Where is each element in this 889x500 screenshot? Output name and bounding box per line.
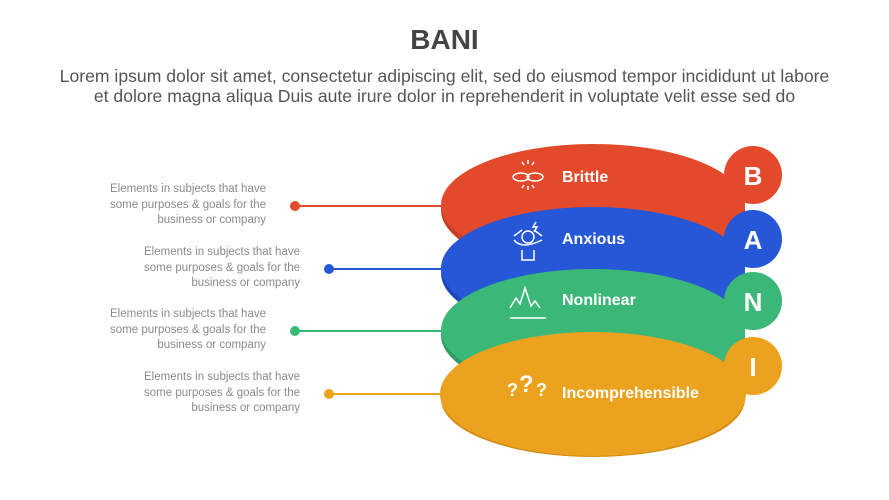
layer: Anxious: Anxious bbox=[562, 231, 625, 248]
layer: Brittle: B bbox=[744, 161, 762, 191]
layer: Nonlinear: N bbox=[744, 287, 762, 317]
layer: Brittle: Brittle bbox=[562, 169, 608, 186]
layer: Incomprehensible bbox=[440, 332, 782, 457]
description 1: Elements in subjects that have some purposes & goals for the business or company bbox=[110, 183, 266, 226]
layer: Brittle bbox=[441, 144, 782, 272]
subtitle bbox=[60, 66, 829, 106]
layer: Incomprehensible: I bbox=[749, 352, 757, 382]
layer: Incomprehensible: ? bbox=[507, 380, 518, 400]
layer: Incomprehensible: Incomprehensible bbox=[562, 385, 699, 402]
subtitle: et dolore magna aliqua Duis aute irure dolor in reprehenderit in voluptate velit esse sed do bbox=[94, 86, 795, 106]
layer: Nonlinear bbox=[441, 269, 782, 397]
layer: Incomprehensible: ? bbox=[536, 380, 547, 400]
connector lines bbox=[290, 201, 445, 399]
layer: Incomprehensible: ? bbox=[519, 371, 534, 398]
layer: Anxious: A bbox=[744, 225, 763, 255]
description 3: Elements in subjects that have some purposes & goals for the business or company bbox=[110, 308, 266, 351]
subtitle: Lorem ipsum dolor sit amet, consectetur adipiscing elit, sed do eiusmod tempor incididunt ut labore bbox=[60, 66, 829, 86]
title: BANI bbox=[410, 24, 479, 55]
layer: Nonlinear: Nonlinear bbox=[562, 292, 636, 309]
layer: Anxious bbox=[441, 207, 782, 335]
description 2: Elements in subjects that have some purposes & goals for the business or company bbox=[144, 246, 300, 289]
description 4: Elements in subjects that have some purposes & goals for the business or company bbox=[144, 371, 300, 414]
